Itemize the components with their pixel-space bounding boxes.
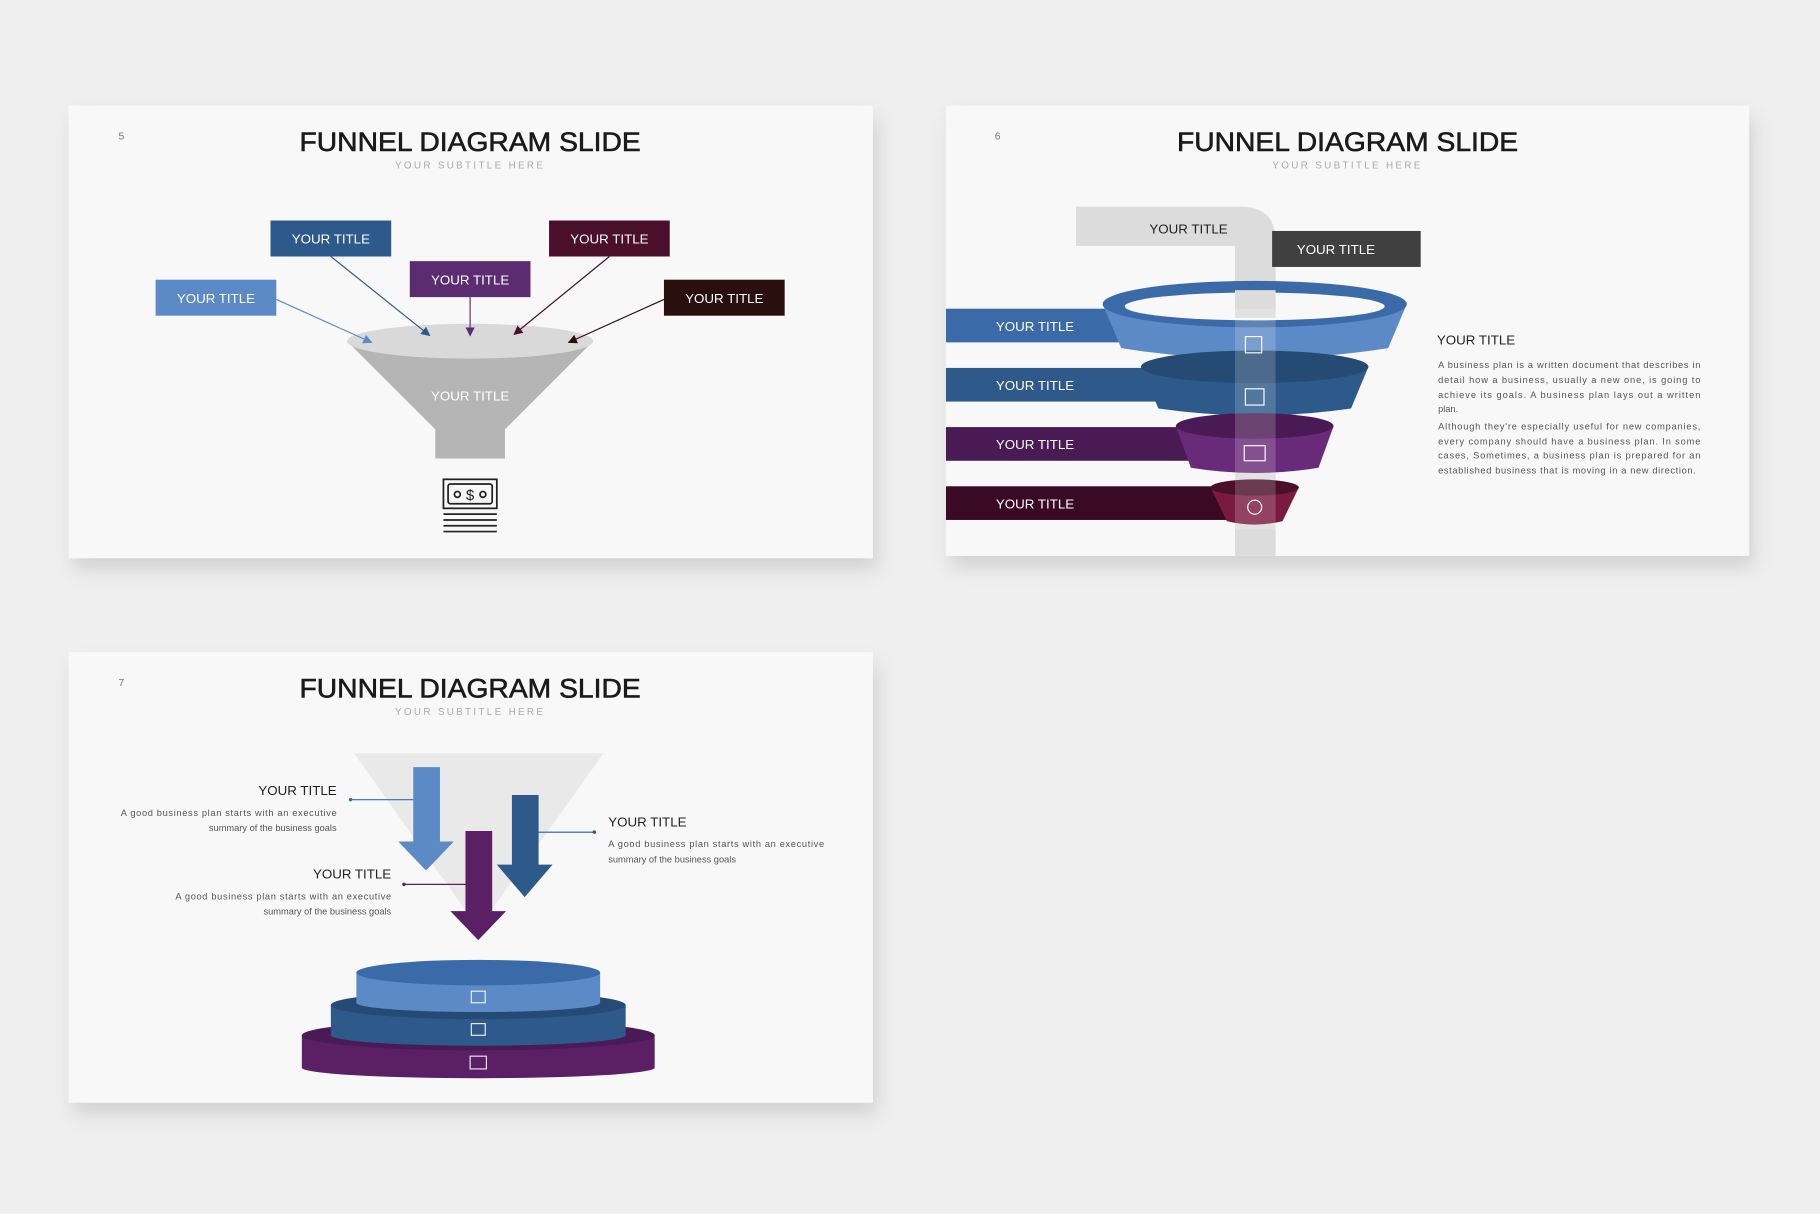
text blocks: A good business plan starts with an executive — [121, 808, 337, 818]
right text block: Although they're especially useful for new companies, — [1438, 421, 1700, 431]
right text block: achieve its goals. A business plan lays out a written — [1438, 390, 1700, 400]
gray pipe: YOUR TITLE — [1149, 221, 1228, 236]
icons in rings — [1244, 337, 1265, 514]
slide number 5: 5 — [118, 131, 124, 142]
label boxes: YOUR TITLE — [685, 291, 764, 306]
heading slide 5: FUNNEL DIAGRAM SLIDE — [300, 127, 641, 157]
label boxes: YOUR TITLE — [177, 291, 255, 306]
icon: money — [443, 479, 497, 532]
icon: money: $ — [466, 487, 475, 504]
left bars: YOUR TITLE — [996, 496, 1074, 511]
heading slide 6 — [1177, 127, 1518, 171]
right text block: YOUR TITLE — [1437, 333, 1515, 348]
label boxes: YOUR TITLE — [292, 232, 370, 247]
heading slide 6: YOUR SUBTITLE HERE — [1272, 160, 1423, 171]
slide number 6: 6 — [995, 131, 1001, 142]
right text block: A business plan is a written document that describes in — [1438, 360, 1700, 370]
dark label box — [1272, 231, 1421, 267]
text blocks: YOUR TITLE — [608, 814, 687, 829]
arrows — [398, 767, 553, 940]
slide number 7: 7 — [118, 678, 124, 689]
text blocks: summary of the business goals — [608, 854, 736, 864]
heading slide 6: FUNNEL DIAGRAM SLIDE — [1177, 127, 1518, 157]
background triangle — [354, 753, 604, 928]
label boxes: YOUR TITLE — [570, 232, 649, 247]
panel: slide 6 — [946, 106, 1749, 556]
heading slide 7: YOUR SUBTITLE HERE — [395, 707, 545, 718]
text blocks: YOUR TITLE — [313, 867, 391, 882]
heading slide 5 — [300, 127, 641, 171]
right text block: established business that is moving in a new direction. — [1438, 466, 1696, 476]
label boxes: YOUR TITLE — [431, 272, 509, 287]
right text block: cases, Sometimes, a business plan is prepared for an — [1438, 450, 1700, 460]
text blocks: YOUR TITLE — [258, 783, 337, 798]
left bars: YOUR TITLE — [996, 437, 1074, 452]
right text block — [1437, 333, 1700, 476]
left bars: YOUR TITLE — [996, 319, 1074, 334]
stacked cylinders — [302, 960, 655, 1078]
left bars — [946, 309, 1236, 520]
text blocks: summary of the business goals — [263, 907, 392, 917]
text blocks: A good business plan starts with an executive — [608, 839, 824, 849]
dark label box: YOUR TITLE — [1297, 242, 1375, 257]
funnel — [347, 324, 593, 458]
funnel: YOUR TITLE — [431, 388, 509, 403]
heading slide 7: FUNNEL DIAGRAM SLIDE — [300, 674, 641, 704]
heading slide 5: YOUR SUBTITLE HERE — [395, 160, 545, 171]
heading slide 7 — [300, 674, 641, 718]
gray pipe — [1076, 207, 1276, 556]
funnel rings — [1103, 281, 1407, 529]
right text block: every company should have a business plan. In some — [1438, 437, 1700, 447]
text blocks — [121, 783, 824, 917]
right text block: plan. — [1438, 404, 1458, 414]
label boxes — [156, 221, 785, 316]
left bars: YOUR TITLE — [996, 378, 1074, 393]
right text block: detail how a business, usually a new one, is going to — [1438, 375, 1700, 385]
panel: slide 5 — [69, 106, 873, 558]
text blocks: A good business plan starts with an executive — [175, 891, 391, 901]
text blocks: summary of the business goals — [209, 823, 337, 833]
connectors — [349, 798, 596, 886]
connector lines — [276, 256, 664, 342]
panel: slide 7 — [69, 652, 873, 1103]
